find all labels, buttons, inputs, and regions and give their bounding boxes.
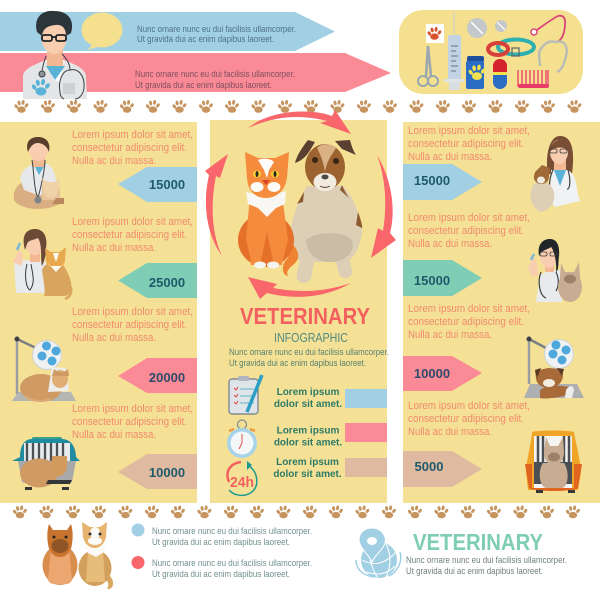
legend: red dot bbox=[132, 556, 144, 569]
text: red legend: Ut gravida dui ac enim dapibus laoreet. bbox=[152, 568, 290, 579]
illustration: veterinarian bbox=[23, 11, 87, 99]
left arrow: 25000 bbox=[118, 263, 197, 298]
text: left blocks: Lorem ipsum dolor sit amet, bbox=[72, 129, 193, 141]
text: left blocks: Nulla ac dui massa. bbox=[72, 429, 156, 441]
left arrow: 20000: 20000 bbox=[149, 370, 185, 385]
text: center intro: Ut gravida dui ac enim dapibus laoreet. bbox=[229, 357, 366, 368]
text: red legend: Nunc ornare nunc eu dui facilisis ullamcorper. bbox=[152, 557, 312, 568]
illustration: surgery lamp and cat bbox=[12, 336, 76, 402]
text: right blocks bbox=[408, 125, 530, 438]
bars: legend bbox=[345, 389, 387, 477]
icon: stopwatch bbox=[227, 420, 257, 458]
right arrow: 10000: 10000 bbox=[414, 366, 450, 381]
text: left blocks: consectetur adipiscing elit. bbox=[72, 142, 187, 154]
left arrow: 10000: 10000 bbox=[149, 465, 185, 480]
right arrow: 15000 second: 15000 bbox=[414, 273, 450, 288]
text: pink banner: Ut gravida dui ac enim dapibus laoreet. bbox=[135, 79, 272, 90]
text: right blocks: consectetur adipiscing elit. bbox=[408, 138, 524, 150]
left arrow: 10000 bbox=[118, 454, 197, 489]
text: blue banner: Ut gravida dui ac enim dapibus laoreet. bbox=[137, 33, 274, 44]
text: right blocks: Nulla ac dui massa. bbox=[408, 238, 492, 250]
panel: center bbox=[210, 120, 387, 503]
right arrow: 15000 bbox=[403, 164, 482, 200]
text: left blocks: Nulla ac dui massa. bbox=[72, 332, 156, 344]
banner: pink arrow bbox=[0, 53, 391, 92]
text: right blocks: Lorem ipsum dolor sit amet, bbox=[408, 400, 530, 412]
text: left blocks: Lorem ipsum dolor sit amet, bbox=[72, 306, 193, 318]
heading: infographic: INFOGRAPHIC bbox=[274, 330, 348, 345]
text: lorem list bbox=[273, 387, 342, 480]
text: lorem list: dolor sit amet. bbox=[274, 399, 342, 410]
paw row: top bbox=[14, 100, 582, 113]
text: lorem list: Lorem ipsum bbox=[277, 426, 339, 436]
text: pink banner: Nunc ornare nunc eu dui facilisis ullamcorper. bbox=[135, 68, 295, 79]
icon: globe with pin bbox=[356, 528, 401, 578]
illustration: bottom bulldog bbox=[42, 524, 78, 585]
text: left blocks bbox=[72, 129, 193, 441]
text: bottom right: Ut gravida dui ac enim dapibus laoreet. bbox=[406, 565, 543, 576]
icon: clipboard bbox=[229, 375, 262, 414]
text: left blocks: consectetur adipiscing elit. bbox=[72, 229, 187, 241]
illustration: vet with dog bbox=[531, 136, 580, 212]
text: lorem list: dolor sit amet. bbox=[273, 469, 342, 480]
circular arrows bbox=[205, 110, 396, 299]
text: right blocks: Lorem ipsum dolor sit amet, bbox=[408, 303, 530, 315]
illustration: bulldog in carrier bbox=[525, 430, 582, 493]
text: right blocks: Nulla ac dui massa. bbox=[408, 151, 492, 163]
right arrow: 15000: 15000 bbox=[414, 173, 450, 188]
right arrow: 15000 second bbox=[403, 260, 482, 296]
text: lorem list: dolor sit amet. bbox=[274, 438, 342, 448]
text: left blocks: Lorem ipsum dolor sit amet, bbox=[72, 216, 193, 228]
panel: vet tools bbox=[399, 10, 583, 94]
illustration: vet with syringe and cat bbox=[13, 229, 71, 299]
right arrow: 5000: 5000 bbox=[415, 459, 443, 474]
heading: bottom veterinary: VETERINARY bbox=[413, 529, 543, 555]
right arrow: 5000 bbox=[403, 451, 482, 487]
heading: veterinary: VETERINARY bbox=[240, 303, 370, 329]
text: lorem list: Lorem ipsum bbox=[277, 387, 339, 398]
text: right blocks: consectetur adipiscing elit. bbox=[408, 225, 524, 237]
text: right blocks: Lorem ipsum dolor sit amet, bbox=[408, 212, 530, 224]
left arrow: 20000 bbox=[118, 358, 197, 393]
text: right blocks: Nulla ac dui massa. bbox=[408, 426, 492, 438]
text: right blocks: consectetur adipiscing elit. bbox=[408, 316, 524, 328]
banner: blue arrow bbox=[0, 12, 335, 51]
icon: speech bubble bbox=[82, 12, 122, 50]
panel: left bbox=[0, 122, 197, 503]
text: left blocks: Nulla ac dui massa. bbox=[72, 155, 156, 167]
illustration: cat in carrier bbox=[12, 437, 80, 490]
text: bottom right: Nunc ornare nunc eu dui facilisis ullamcorper. bbox=[406, 554, 567, 565]
text: red legend bbox=[152, 557, 312, 579]
text: right blocks: consectetur adipiscing elit. bbox=[408, 413, 524, 425]
illustration: vet with syringe and bulldog bbox=[528, 239, 582, 302]
text: blue legend: Ut gravida dui ac enim dapibus laoreet. bbox=[152, 536, 290, 547]
text: left blocks: consectetur adipiscing elit. bbox=[72, 416, 187, 428]
text: left blocks: consectetur adipiscing elit. bbox=[72, 319, 187, 331]
text: right blocks: Nulla ac dui massa. bbox=[408, 329, 492, 341]
text: center intro: Nunc ornare nunc eu dui facilisis ullamcorper. bbox=[229, 346, 389, 357]
text: pink banner bbox=[135, 68, 295, 90]
text: blue banner: Nunc ornare nunc eu dui facilisis ullamcorper. bbox=[137, 23, 296, 34]
legend: blue dot bbox=[132, 524, 144, 536]
icon: 24h bbox=[227, 461, 257, 495]
icon: 24h: 24h bbox=[230, 474, 254, 491]
text: blue legend: Nunc ornare nunc eu dui facilisis ullamcorper. bbox=[152, 525, 312, 536]
text: left blocks: Lorem ipsum dolor sit amet, bbox=[72, 403, 193, 415]
text: lorem list: Lorem ipsum bbox=[276, 457, 339, 468]
text: bottom right bbox=[406, 554, 567, 576]
right arrow: 10000 bbox=[403, 356, 482, 391]
illustration: bottom cat bbox=[78, 522, 113, 589]
left arrow: 15000 bbox=[118, 167, 197, 202]
text: blue banner bbox=[137, 23, 296, 44]
illustration: vet with cat bbox=[14, 137, 64, 209]
illustration: cat bbox=[238, 152, 298, 276]
text: center intro bbox=[229, 346, 389, 368]
illustration: dog bbox=[290, 140, 362, 283]
text: right blocks: Lorem ipsum dolor sit amet, bbox=[408, 125, 530, 137]
left arrow: 15000: 15000 bbox=[149, 177, 185, 192]
illustration: surgery lamp and dog bbox=[524, 336, 584, 399]
text: left blocks: Nulla ac dui massa. bbox=[72, 242, 156, 254]
panel: right bbox=[403, 122, 600, 503]
text: blue legend bbox=[152, 525, 312, 547]
paw row: bottom bbox=[12, 505, 581, 518]
left arrow: 25000: 25000 bbox=[149, 275, 185, 290]
